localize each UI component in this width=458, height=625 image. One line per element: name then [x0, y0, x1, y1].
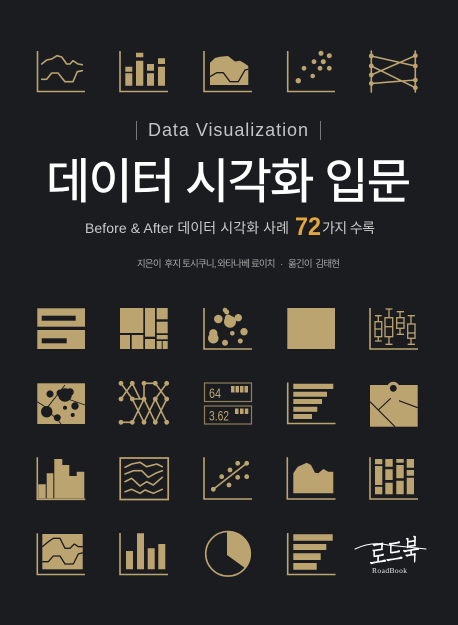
icon: slope chart: [369, 51, 418, 92]
icon: horizontal bar chart: [288, 382, 336, 424]
icon: box plot: [370, 308, 418, 349]
icon: treemap: [120, 308, 168, 349]
icon: stacked column chart: [370, 457, 418, 499]
icon: number cards: 64: [209, 385, 221, 401]
tagline: 72: [295, 213, 321, 241]
icon: pie chart: [206, 531, 250, 576]
icon: area chart with line: [204, 51, 252, 92]
icon: bubble chart: [204, 308, 252, 349]
icon: bar chart: [120, 533, 168, 574]
publisher logo: RoadBook: [355, 534, 426, 575]
icon: scatter plot: [288, 51, 335, 92]
subtitle: Data Visualization: Data Visualization: [148, 120, 308, 140]
icon: text boxes: [37, 308, 85, 349]
icon: scatter with trend line: [204, 457, 252, 499]
tagline: [85, 213, 375, 241]
icon: capped bar chart: [120, 51, 168, 92]
authors: 지은이 후지 토시쿠니, 와타나베 료이치 · 옮긴이 김태현: [137, 258, 340, 270]
icon: bubble map: [37, 383, 85, 424]
publisher logo: RoadBook: RoadBook: [372, 566, 407, 575]
icon: lines on filled panel: [37, 533, 85, 574]
icon: area chart: [287, 457, 336, 499]
tagline: 가지 수록: [322, 220, 375, 236]
icon: number cards: 3.62: [209, 408, 229, 424]
publisher logo: RoadBook: 로드북: [366, 534, 421, 571]
title: 데이터 시각화 입문: [46, 156, 411, 209]
icon: framed wave lines: [120, 458, 168, 500]
icon: network diagram: [119, 381, 169, 425]
icon: filled square: [287, 308, 335, 349]
icon: map with pin: [370, 382, 418, 427]
tagline: Before & After 데이터 시각화 사례: [85, 220, 289, 236]
icon: number cards: [204, 383, 252, 424]
icon: horizontal bars: [288, 533, 336, 574]
icon: two line chart: [38, 51, 85, 92]
icon: step histogram: [37, 457, 85, 499]
